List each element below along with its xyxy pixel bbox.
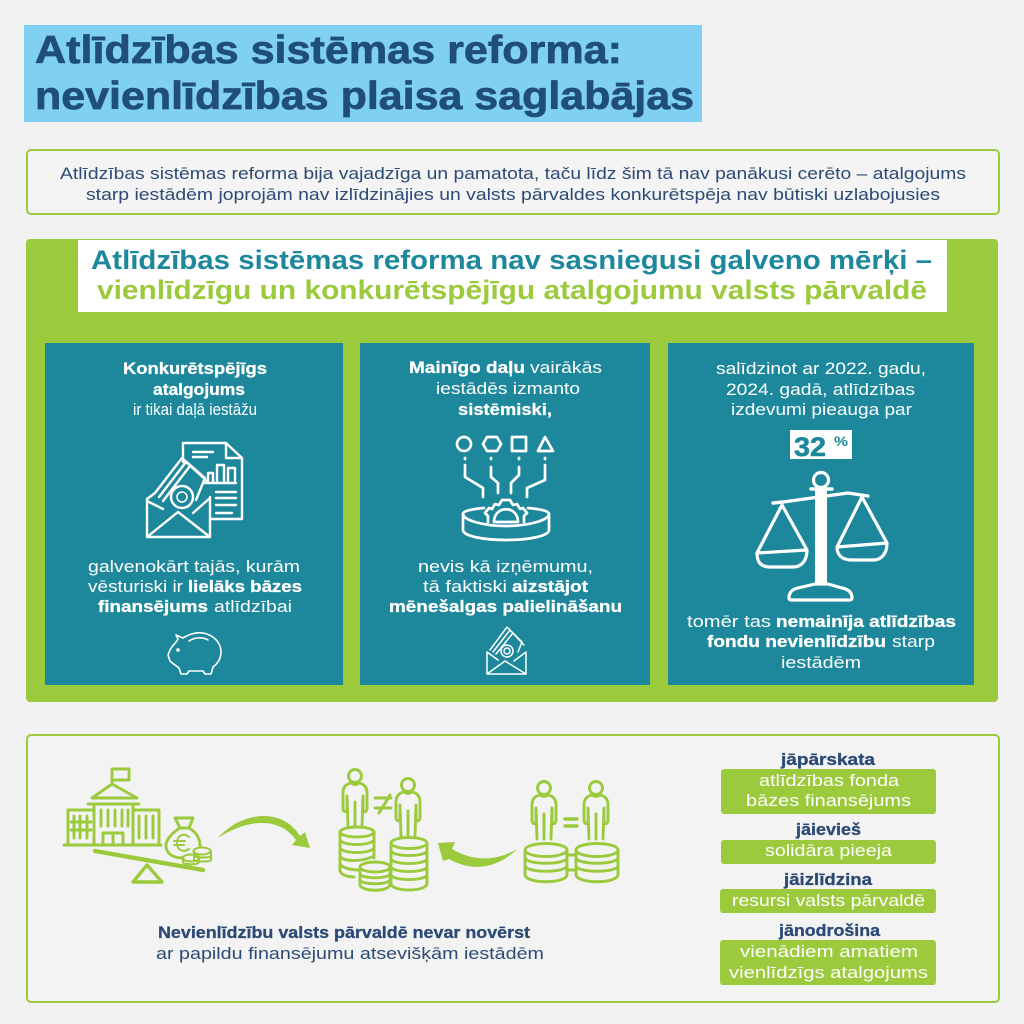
caption: Nevienlīdzību valsts pārvaldē nevar novērst	[158, 923, 530, 942]
icon: envelope with money and report	[147, 443, 242, 537]
card 1 bottom text: finansējums	[98, 597, 208, 616]
panel heading	[78, 240, 947, 312]
card 3 bottom text: tomēr tas	[687, 612, 771, 631]
card 2 bottom text: tā faktiski	[423, 577, 507, 596]
recommendation: ensure: jānodrošina	[778, 921, 881, 940]
title	[24, 25, 702, 122]
card 2 bottom text: mēnešalgas palielināšanu	[389, 597, 622, 616]
recommendation: ensure: vienlīdzīgs atalgojums	[729, 963, 928, 982]
card 1 bottom text	[88, 557, 302, 616]
card 2 top text: sistēmiski,	[458, 400, 552, 419]
card 1 bottom text: vēsturiski ir	[88, 577, 183, 596]
recommendation: equalize	[720, 870, 936, 913]
card 1 bottom text: atlīdzībai	[214, 597, 292, 616]
arrow: equal pay to unequal pay	[438, 842, 517, 867]
card 3 bottom text: fondu nevienlīdzību	[707, 632, 886, 651]
panel: recommendations	[27, 735, 999, 1002]
card: expenditure growth	[668, 343, 974, 685]
recommendation: review: atlīdzības fonda	[759, 771, 900, 790]
card 3 bottom text: iestādēm	[781, 653, 861, 672]
recommendation: introduce: solidāra pieeja	[765, 841, 893, 860]
card 1 top text	[123, 359, 267, 419]
card 3 top text: 2024. gadā, atlīdzības	[726, 380, 915, 399]
card: variable pay	[360, 343, 650, 685]
intro text box: starp iestādēm joprojām nav izlīdzinājies un valsts pārvaldes konkurētspēja nav būtiski uzlabojusies	[86, 185, 940, 204]
card 3 top text: salīdzinot ar 2022. gadu,	[716, 359, 926, 378]
card 3 bottom text: starp	[892, 632, 935, 651]
recommendation: equalize: resursi valsts pārvaldē	[732, 891, 925, 910]
title: nevienlīdzības plaisa saglabājas	[35, 75, 694, 118]
panel heading: vienlīdzīgu un konkurētspējīgu atalgojumu valsts pārvaldē	[97, 275, 927, 305]
card 3 bottom text	[687, 612, 956, 672]
card 1 top text: ir tikai daļā iestāžu	[133, 400, 257, 419]
card 3 top text	[716, 359, 926, 419]
icon: unequal people on coins	[340, 770, 427, 890]
card 2 top text: vairākās	[530, 358, 602, 377]
card 1 bottom text: galvenokārt tajās, kurām	[88, 557, 300, 576]
intro text box	[27, 150, 999, 214]
card 3 top text: izdevumi pieauga par	[731, 400, 912, 419]
recommendation: ensure	[720, 921, 936, 985]
card: competitive pay	[45, 343, 343, 685]
card 2 bottom text	[389, 557, 622, 616]
panel heading: Atlīdzības sistēmas reforma nav sasniegusi galveno mērķi –	[91, 245, 932, 275]
recommendation: review	[721, 750, 936, 814]
icon: shapes into gear bowl	[457, 437, 553, 540]
icon: equal people on coins	[525, 782, 618, 882]
icon: envelope with banknotes	[487, 627, 526, 674]
card 3 bottom text: nemainīja atlīdzības	[776, 612, 956, 631]
panel: main green findings	[26, 239, 998, 702]
card 2 bottom text: aizstājot	[512, 577, 588, 596]
stat: 32 percent: 32	[794, 432, 826, 462]
icon: balance scale	[757, 472, 887, 600]
card 2 top text: iestādēs izmanto	[436, 379, 580, 398]
recommendation: introduce	[721, 820, 936, 864]
caption: ar papildu finansējumu atsevišķām iestādēm	[156, 944, 544, 963]
recommendation: introduce: jāievieš	[795, 820, 861, 839]
recommendation: review: bāzes finansējums	[746, 791, 911, 810]
arrow: building to unequal pay	[218, 816, 310, 848]
recommendation: equalize: jāizlīdzina	[783, 870, 873, 889]
card 1 bottom text: lielāks bāzes	[188, 577, 302, 596]
card 2 top text	[409, 358, 602, 419]
card 1 top text: atalgojums	[153, 380, 245, 399]
caption	[156, 923, 544, 963]
title: Atlīdzības sistēmas reforma:	[35, 29, 622, 72]
stat: 32 percent	[790, 430, 852, 462]
icon: piggy bank	[168, 633, 221, 674]
recommendation: ensure: vienādiem amatiem	[740, 942, 918, 961]
stat: 32 percent: %	[834, 433, 849, 449]
recommendation: review: jāpārskata	[780, 750, 876, 769]
card 2 top text: Mainīgo daļu	[409, 358, 525, 377]
card 2 bottom text: nevis kā izņēmumu,	[418, 557, 593, 576]
icon: government building on seesaw	[64, 769, 211, 882]
intro text box: Atlīdzības sistēmas reforma bija vajadzīga un pamatota, taču līdz šim tā nav panākusi cerēto – atalgojums	[60, 164, 966, 183]
card 1 top text: Konkurētspējīgs	[123, 359, 267, 378]
